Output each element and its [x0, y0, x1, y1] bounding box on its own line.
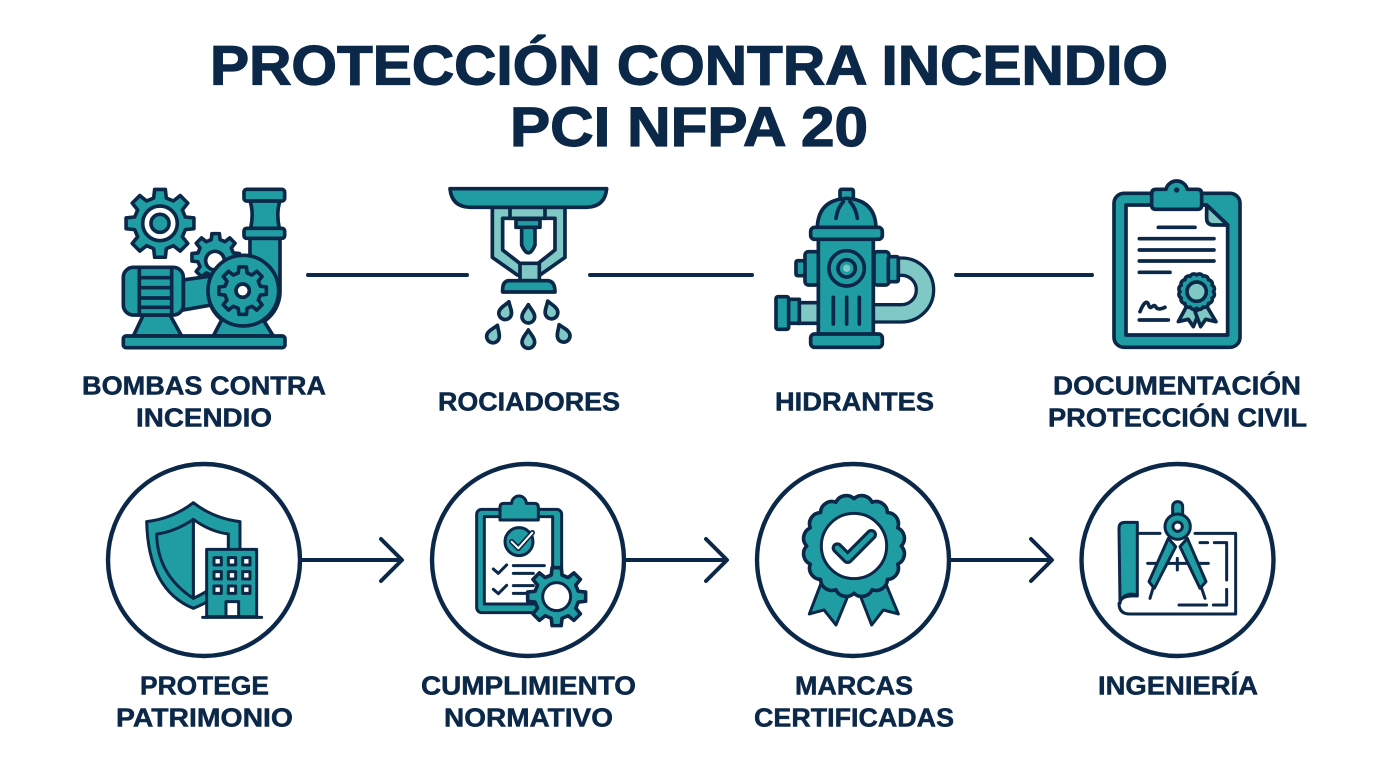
title: PCI NFPA 20 — [510, 95, 868, 158]
label: bombas contra incendio: BOMBAS CONTRA — [82, 370, 326, 400]
label: marcas certificadas: MARCAS — [795, 670, 913, 700]
icon: marcas certificadas — [757, 464, 949, 656]
connector line — [956, 273, 1092, 277]
label: marcas certificadas: CERTIFICADAS — [754, 702, 954, 732]
title — [210, 34, 1168, 158]
icon: ingeniería — [1082, 464, 1274, 656]
title: PROTECCIÓN CONTRA INCENDIO — [210, 34, 1168, 96]
icon: fire pump — [123, 189, 285, 348]
connector line — [308, 273, 467, 277]
label: documentación protección civil: DOCUMENTACIÓN — [1053, 370, 1301, 400]
label: rociadores: ROCIADORES — [438, 386, 620, 416]
label: protege patrimonio: PROTEGE — [140, 670, 269, 700]
icon: cumplimiento normativo — [432, 464, 624, 656]
label: bombas contra incendio — [82, 370, 326, 432]
icon: hydrant — [776, 189, 925, 347]
connector line — [590, 273, 752, 277]
label: ingeniería: INGENIERÍA — [1098, 670, 1258, 700]
arrow 3 — [950, 539, 1052, 581]
label: bombas contra incendio: INCENDIO — [136, 402, 272, 432]
arrow 2 — [625, 539, 727, 581]
label: protege patrimonio: PATRIMONIO — [116, 702, 293, 732]
icon: sprinkler — [450, 189, 607, 348]
label: marcas certificadas — [754, 670, 954, 732]
icon: protege patrimonio — [108, 464, 300, 656]
label: documentación protección civil — [1048, 370, 1307, 432]
label: protege patrimonio — [116, 670, 293, 732]
arrow 1 — [300, 539, 402, 581]
label: hidrantes: HIDRANTES — [775, 386, 934, 416]
label: cumplimiento normativo: NORMATIVO — [444, 702, 613, 732]
label: cumplimiento normativo — [421, 670, 636, 732]
icon: documentation clipboard — [1114, 181, 1240, 347]
label: documentación protección civil: PROTECCIÓN CIVIL — [1048, 402, 1307, 432]
label: cumplimiento normativo: CUMPLIMIENTO — [421, 670, 636, 700]
